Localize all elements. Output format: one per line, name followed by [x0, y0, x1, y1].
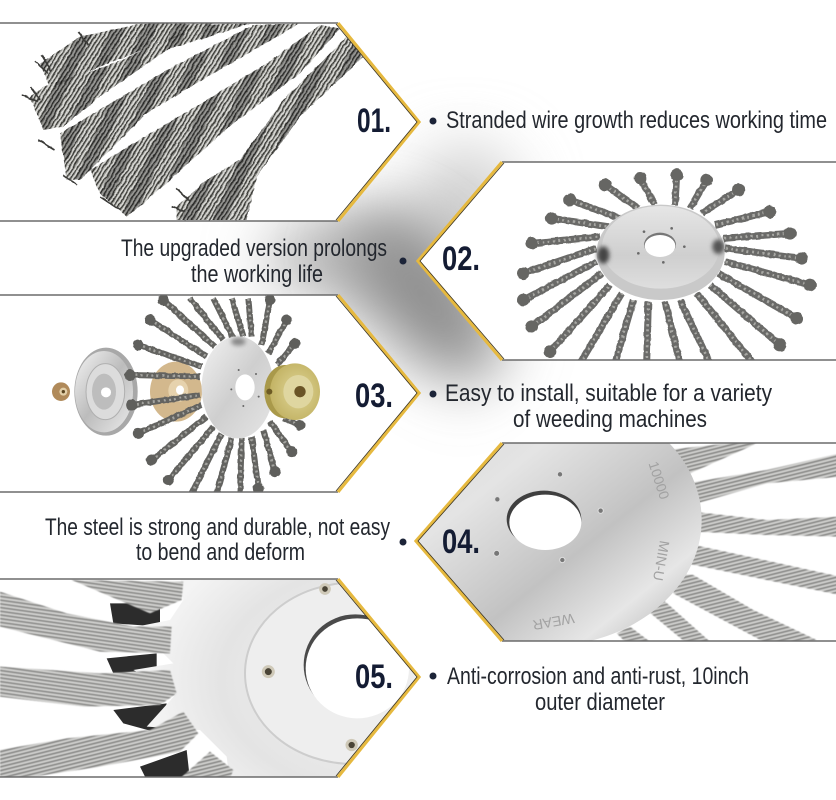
- image: disc edge and strands: [0, 580, 416, 776]
- bullet and text 3: [430, 380, 772, 433]
- bullet and text 3: Easy to install, suitable for a variety: [445, 380, 772, 407]
- bullet and text 5: [430, 663, 749, 716]
- bullet and text 3: of weeding machines: [513, 406, 707, 433]
- frame: panel 2 edges: [418, 162, 836, 360]
- frame: panel 3 edges: [0, 295, 419, 492]
- number 01: 01.: [357, 102, 391, 140]
- text 2: upgraded version: The upgraded version prolongs: [121, 235, 387, 262]
- image: steel disc and thick strands: [418, 444, 836, 640]
- gold hub: [264, 363, 320, 420]
- text 2: upgraded version: the working life: [191, 261, 323, 288]
- dome washer: [74, 348, 138, 436]
- bullet and text 5: Anti-corrosion and anti-rust, 10inch: [447, 663, 749, 690]
- number 04: 04.: [442, 523, 480, 561]
- engraved disc lettering: 10000: [645, 459, 673, 501]
- brass washer: [150, 362, 202, 422]
- frame: panel 1 edges: [0, 23, 419, 221]
- text 4: steel: [45, 514, 406, 566]
- small nut: [52, 382, 70, 401]
- text 4: steel: to bend and deform: [136, 539, 305, 566]
- hub hole: [507, 491, 581, 550]
- hub hole: [304, 614, 409, 718]
- panel 4: disc close-up: [414, 442, 836, 642]
- image: wire wheel with disc: [523, 175, 810, 363]
- image: five twisted wire ropes: [22, 23, 363, 220]
- frame: panel 4 edges: [416, 443, 836, 641]
- engraved disc lettering: [531, 459, 673, 633]
- number 05: 05.: [355, 658, 393, 696]
- number 02: 02.: [442, 240, 480, 278]
- bullet and text 5: outer diameter: [535, 689, 665, 716]
- image: wheel, washers and nut: [52, 298, 320, 493]
- main disc: [202, 336, 274, 438]
- panel 1: stranded wire: [0, 23, 419, 221]
- panel 3: exploded assembly: [0, 295, 419, 493]
- text 4: steel: The steel is strong and durable, not easy: [45, 514, 390, 541]
- engraved disc lettering: MIN-U: [650, 539, 673, 582]
- text 2: upgraded version: [121, 235, 406, 288]
- engraved disc lettering: WEAR: [531, 610, 576, 633]
- panel 2: wheel angled view: [418, 162, 836, 363]
- panel 5: macro close-up: [0, 578, 421, 778]
- number 03: 03.: [355, 377, 393, 415]
- frame: panel 5 edges: [0, 579, 419, 777]
